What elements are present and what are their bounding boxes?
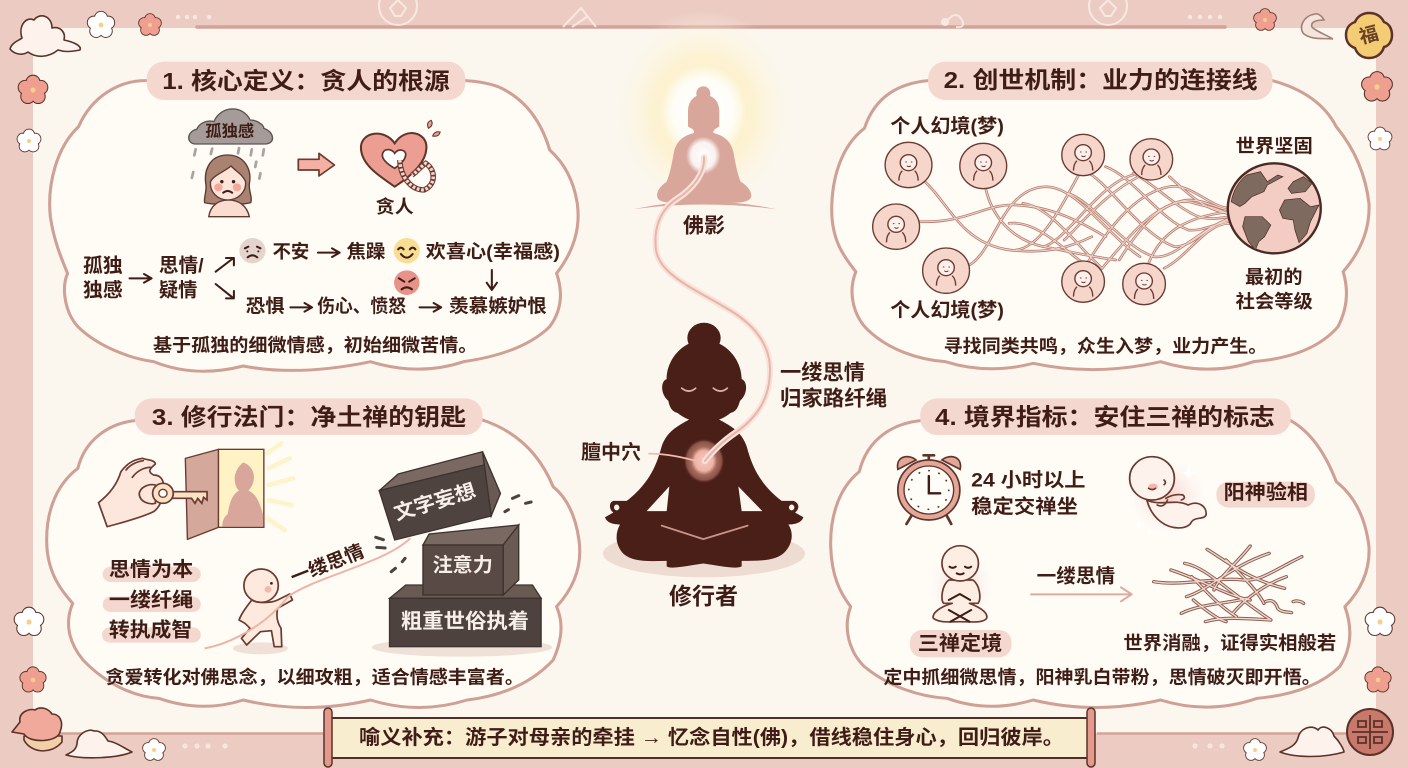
block: attention: 注意力 — [433, 554, 493, 576]
cloud bottom left — [66, 730, 132, 758]
labels: keys of practice: 转执成智 — [109, 618, 192, 641]
dream bubbles left — [873, 142, 1007, 293]
flower lower right white — [1366, 608, 1394, 635]
label: thread meaning: 归家路纤绳 — [780, 386, 887, 410]
panel 2 summary: 寻找同类共鸣，众生入梦，业力产生。 — [944, 336, 1267, 356]
personal illusion label top: 个人幻境(梦) — [890, 115, 1004, 137]
buddha glow — [610, 10, 797, 214]
dream figures — [886, 145, 1161, 299]
karma threads web — [920, 167, 1229, 268]
arrow: joy to envy — [487, 270, 497, 290]
block: word delusions — [379, 452, 500, 540]
panel 2 cloud frame — [832, 81, 1369, 370]
buddha silhouette — [633, 86, 777, 209]
center column: buddha to practitioner — [603, 10, 805, 577]
labels: keys of practice — [102, 558, 201, 643]
lotus bun bottom left — [12, 708, 62, 751]
meditator details — [614, 388, 794, 539]
flower top right pink — [1254, 9, 1276, 30]
label: third dhyana: 三禅定境 — [918, 631, 1002, 655]
flower right white — [1368, 127, 1392, 150]
label: yang spirit sign: 阳神验相 — [1224, 481, 1308, 504]
flow: fear to envy — [246, 295, 547, 318]
panel 1 summary: 基于孤独的细微情感，初始细微苦情。 — [153, 335, 477, 355]
label: thread meaning — [780, 362, 887, 410]
icon: rain cloud with label: 孤独感 — [205, 122, 254, 141]
flow: loneliness to emotion: 疑情 — [159, 280, 197, 301]
panel 2 heading — [928, 62, 1273, 100]
flow: loneliness to emotion: 独感 — [83, 280, 123, 301]
world labels: 世界坚固 — [1236, 136, 1313, 158]
gold medallion top right: 福 — [1357, 22, 1381, 49]
flower bottom left — [143, 739, 165, 760]
flower right pink — [1362, 72, 1392, 100]
corner cloud top left — [10, 16, 80, 56]
panel 1 heading — [147, 62, 465, 100]
text: 24 hours sitting: 24 小时以上 — [971, 470, 1086, 491]
flower left pink — [19, 76, 47, 103]
personal illusion label bottom: 个人幻境(梦) — [890, 299, 1004, 321]
flow: unease to irritation: 焦躁 — [347, 241, 385, 263]
bottom scroll banner: 喻义补充：游子对母亲的牵挂 → 忆念自性(佛)，借线稳住身心，回归彼岸。 — [359, 725, 1064, 749]
acupoint leader line — [648, 454, 698, 462]
panel 4: realm indicators — [831, 398, 1369, 707]
door with buddha — [185, 449, 264, 539]
text: 24 hours sitting: 稳定交禅坐 — [971, 496, 1078, 518]
flow: unease to irritation: 不安 — [272, 241, 309, 263]
thread of longing — [655, 157, 770, 461]
decorative white motifs on border — [177, 0, 1223, 748]
rays of light — [267, 443, 293, 530]
round seal bottom right — [1347, 709, 1393, 755]
block: coarse attachment — [372, 585, 552, 657]
thread label and arrow: 一缕思情 — [1037, 566, 1115, 587]
panel 2: creation mechanism — [832, 62, 1369, 370]
top divider band — [197, 25, 1225, 29]
panel 4 heading — [920, 398, 1291, 435]
meditator shadow — [603, 530, 805, 577]
panel 3 heading: 3. 修行法门：净土禅的钥匙 — [152, 404, 466, 431]
thread label: 一缕思情 — [287, 540, 368, 589]
icon: sad face — [239, 238, 266, 263]
panel 1 heading: 1. 核心定义：贪人的根源 — [162, 68, 450, 95]
world labels: 社会等级 — [1236, 290, 1313, 313]
labels: keys of practice: 思情为本 — [109, 558, 193, 581]
caption: world dissolves: 世界消融，证得实相般若 — [1123, 632, 1336, 654]
panel 1 cloud frame — [50, 81, 578, 371]
flower top left white — [88, 12, 114, 37]
flow: loneliness to emotion: 孤独 — [83, 254, 123, 277]
icon: alarm clock — [898, 455, 960, 524]
block: attention — [423, 525, 519, 595]
arrow: to greedy heart — [298, 153, 334, 176]
flower bottom right — [1244, 739, 1266, 760]
globe: solid world — [1228, 163, 1321, 253]
label: third dhyana — [910, 630, 1011, 657]
flower lower right pink — [1365, 667, 1391, 692]
hand with key — [99, 458, 207, 527]
flower lower left pink — [20, 667, 46, 692]
panel 3 cloud frame — [47, 420, 580, 707]
block: word delusions: 文字妄想 — [391, 478, 479, 525]
panel 4 heading: 4. 境界指标：安住三禅的标志 — [935, 404, 1275, 431]
icon: yang spirit baby — [1121, 453, 1214, 540]
text: 24 hours sitting — [971, 470, 1086, 518]
thread label and arrow — [1031, 566, 1132, 601]
icon: rain cloud with label — [189, 109, 273, 179]
panel 4 summary: 定中抓细微思情，阳神乳白带粉，思情破灭即开悟。 — [883, 667, 1321, 688]
icon: happy face — [394, 238, 420, 263]
panel 3 summary: 贪爱转化对佛思念，以细攻粗，适合情感丰富者。 — [105, 667, 524, 688]
curl cloud top right — [1301, 14, 1333, 39]
flow: fear to envy: 羡慕嫉妒恨 — [449, 295, 547, 318]
icon: meditating figure — [923, 542, 999, 632]
flow: unease to irritation — [272, 241, 385, 263]
panel 1: core definition — [50, 62, 578, 371]
world labels — [1236, 136, 1313, 313]
flower left white — [17, 129, 41, 152]
flow: fear to envy: 恐惧 — [246, 296, 285, 318]
flower lower left white — [15, 608, 43, 635]
icon: chained heart — [361, 120, 440, 190]
bottom scroll banner — [324, 708, 1095, 767]
gold medallion top right — [1346, 13, 1392, 58]
dream bubbles right — [1062, 134, 1173, 305]
block: coarse attachment: 粗重世俗执着 — [401, 609, 529, 633]
panel 3 heading — [135, 398, 483, 435]
thread to blocks — [205, 538, 410, 648]
label: greedy person: 贪人 — [376, 196, 414, 217]
panel 3: practice method — [47, 398, 580, 707]
label: buddha shadow: 佛影 — [683, 214, 725, 238]
flow: loneliness to emotion — [83, 254, 234, 301]
label: thread meaning: 一缕思情 — [780, 362, 865, 384]
acupoint glow — [683, 438, 725, 483]
practitioner silhouette — [605, 323, 803, 568]
child pulling thread — [233, 569, 292, 654]
flow: loneliness to emotion: 思情/ — [159, 255, 204, 277]
cloud bottom right — [1280, 727, 1344, 756]
icon: angry face — [394, 270, 420, 295]
panel 4 cloud frame — [831, 421, 1369, 707]
text: joy: 欢喜心(幸福感) — [426, 241, 560, 263]
cracks and chips — [376, 496, 531, 572]
labels: keys of practice: 一缕纤绳 — [109, 589, 193, 611]
label: practitioner: 修行者 — [669, 583, 738, 609]
label: yang spirit sign — [1216, 481, 1315, 508]
label: acupoint: 膻中穴 — [581, 441, 641, 464]
panel 2 heading: 2. 创世机制：业力的连接线 — [944, 68, 1258, 94]
world labels: 最初的 — [1245, 267, 1303, 289]
flow: fear to envy: 伤心、愤怒 — [317, 296, 406, 318]
flower top left pink — [139, 14, 161, 35]
dissolving web — [1154, 546, 1304, 622]
icon: lonely girl — [204, 155, 251, 217]
